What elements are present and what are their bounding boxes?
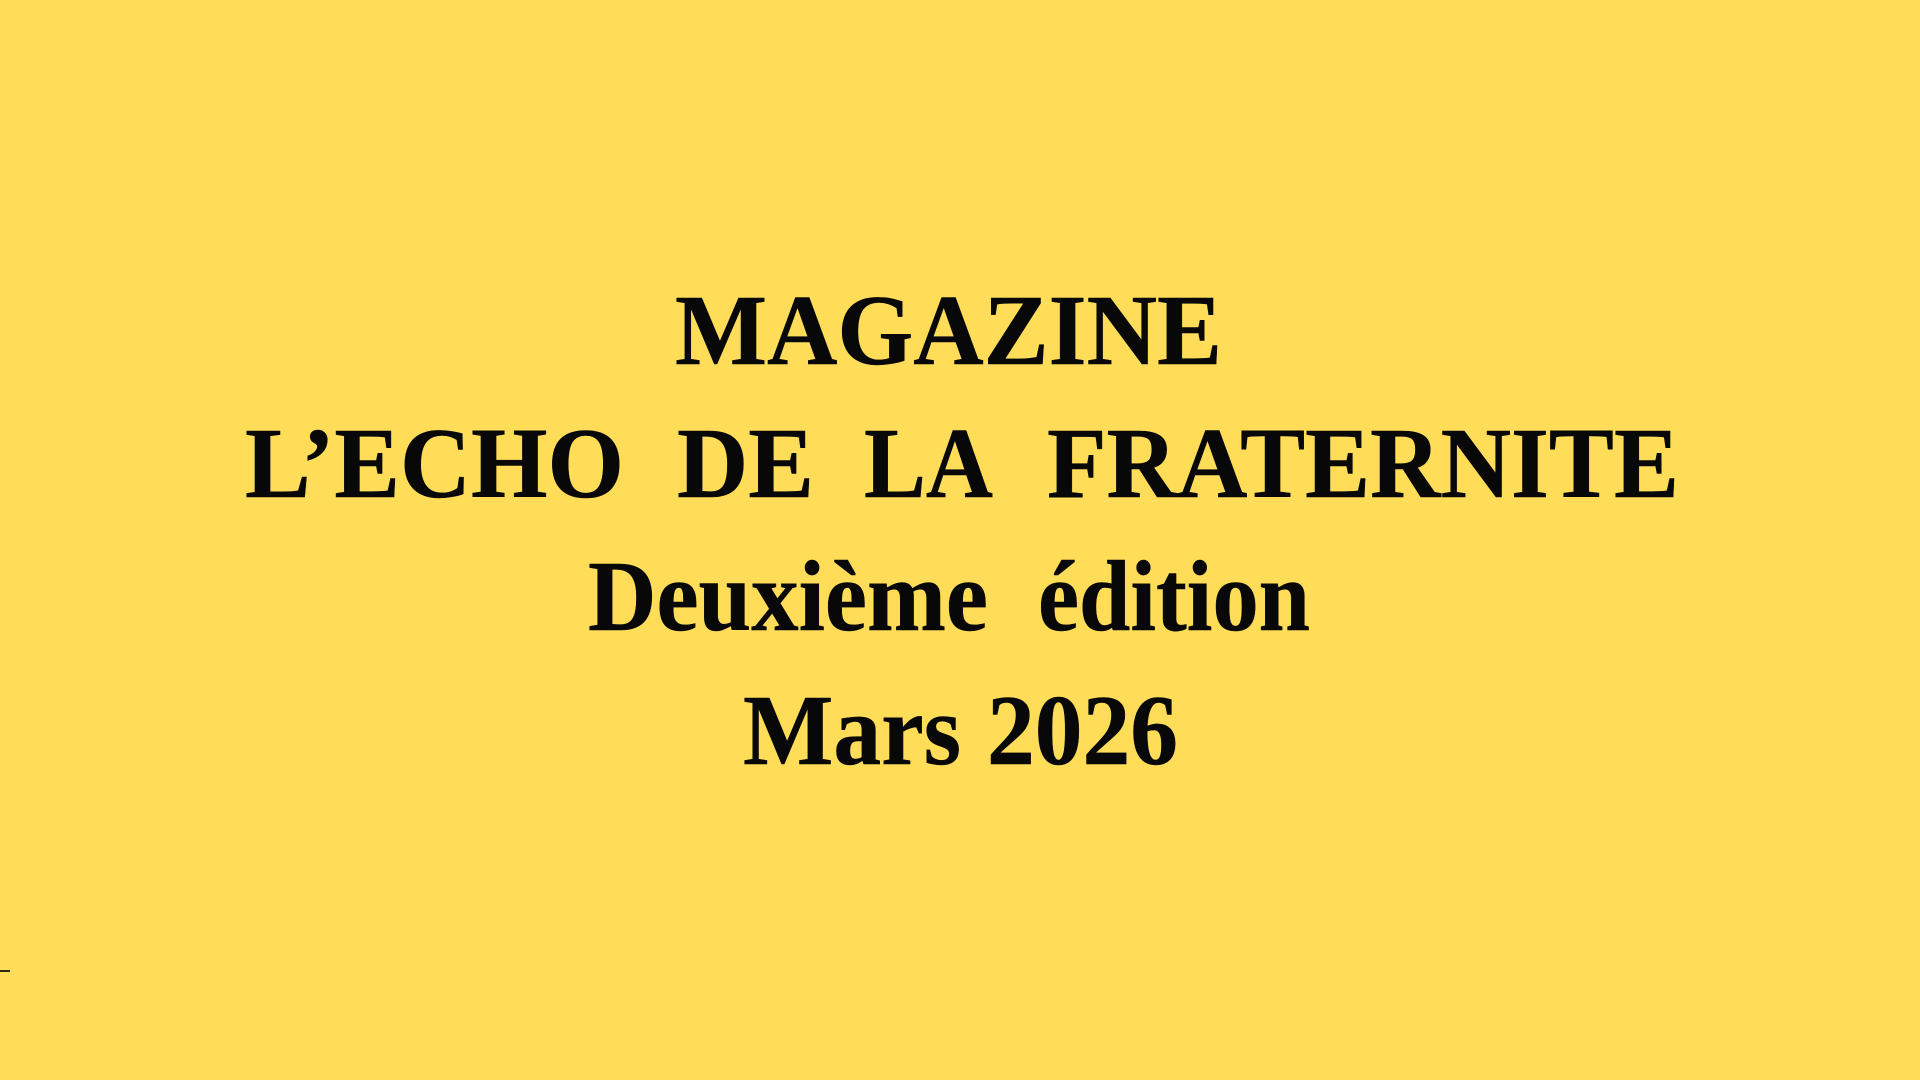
subheading: date: 2026: [987, 674, 1178, 786]
subheading: edition: édition: [1038, 540, 1310, 652]
subheading: edition: [588, 540, 1310, 652]
heading: magazine: MAGAZINE: [675, 274, 1222, 386]
subheading: date: Mars: [743, 674, 961, 786]
subheading: edition: Deuxième: [588, 540, 988, 652]
subheading: date: [743, 674, 1178, 786]
heading: magazine name: LA: [864, 407, 993, 519]
heading: magazine name: [245, 407, 1679, 519]
heading: magazine name: DE: [677, 407, 814, 519]
heading: magazine name: L’ECHO: [245, 407, 624, 519]
small mark at left edge: [0, 970, 10, 972]
heading: magazine name: FRATERNITE: [1047, 407, 1679, 519]
title block: [245, 274, 1679, 786]
